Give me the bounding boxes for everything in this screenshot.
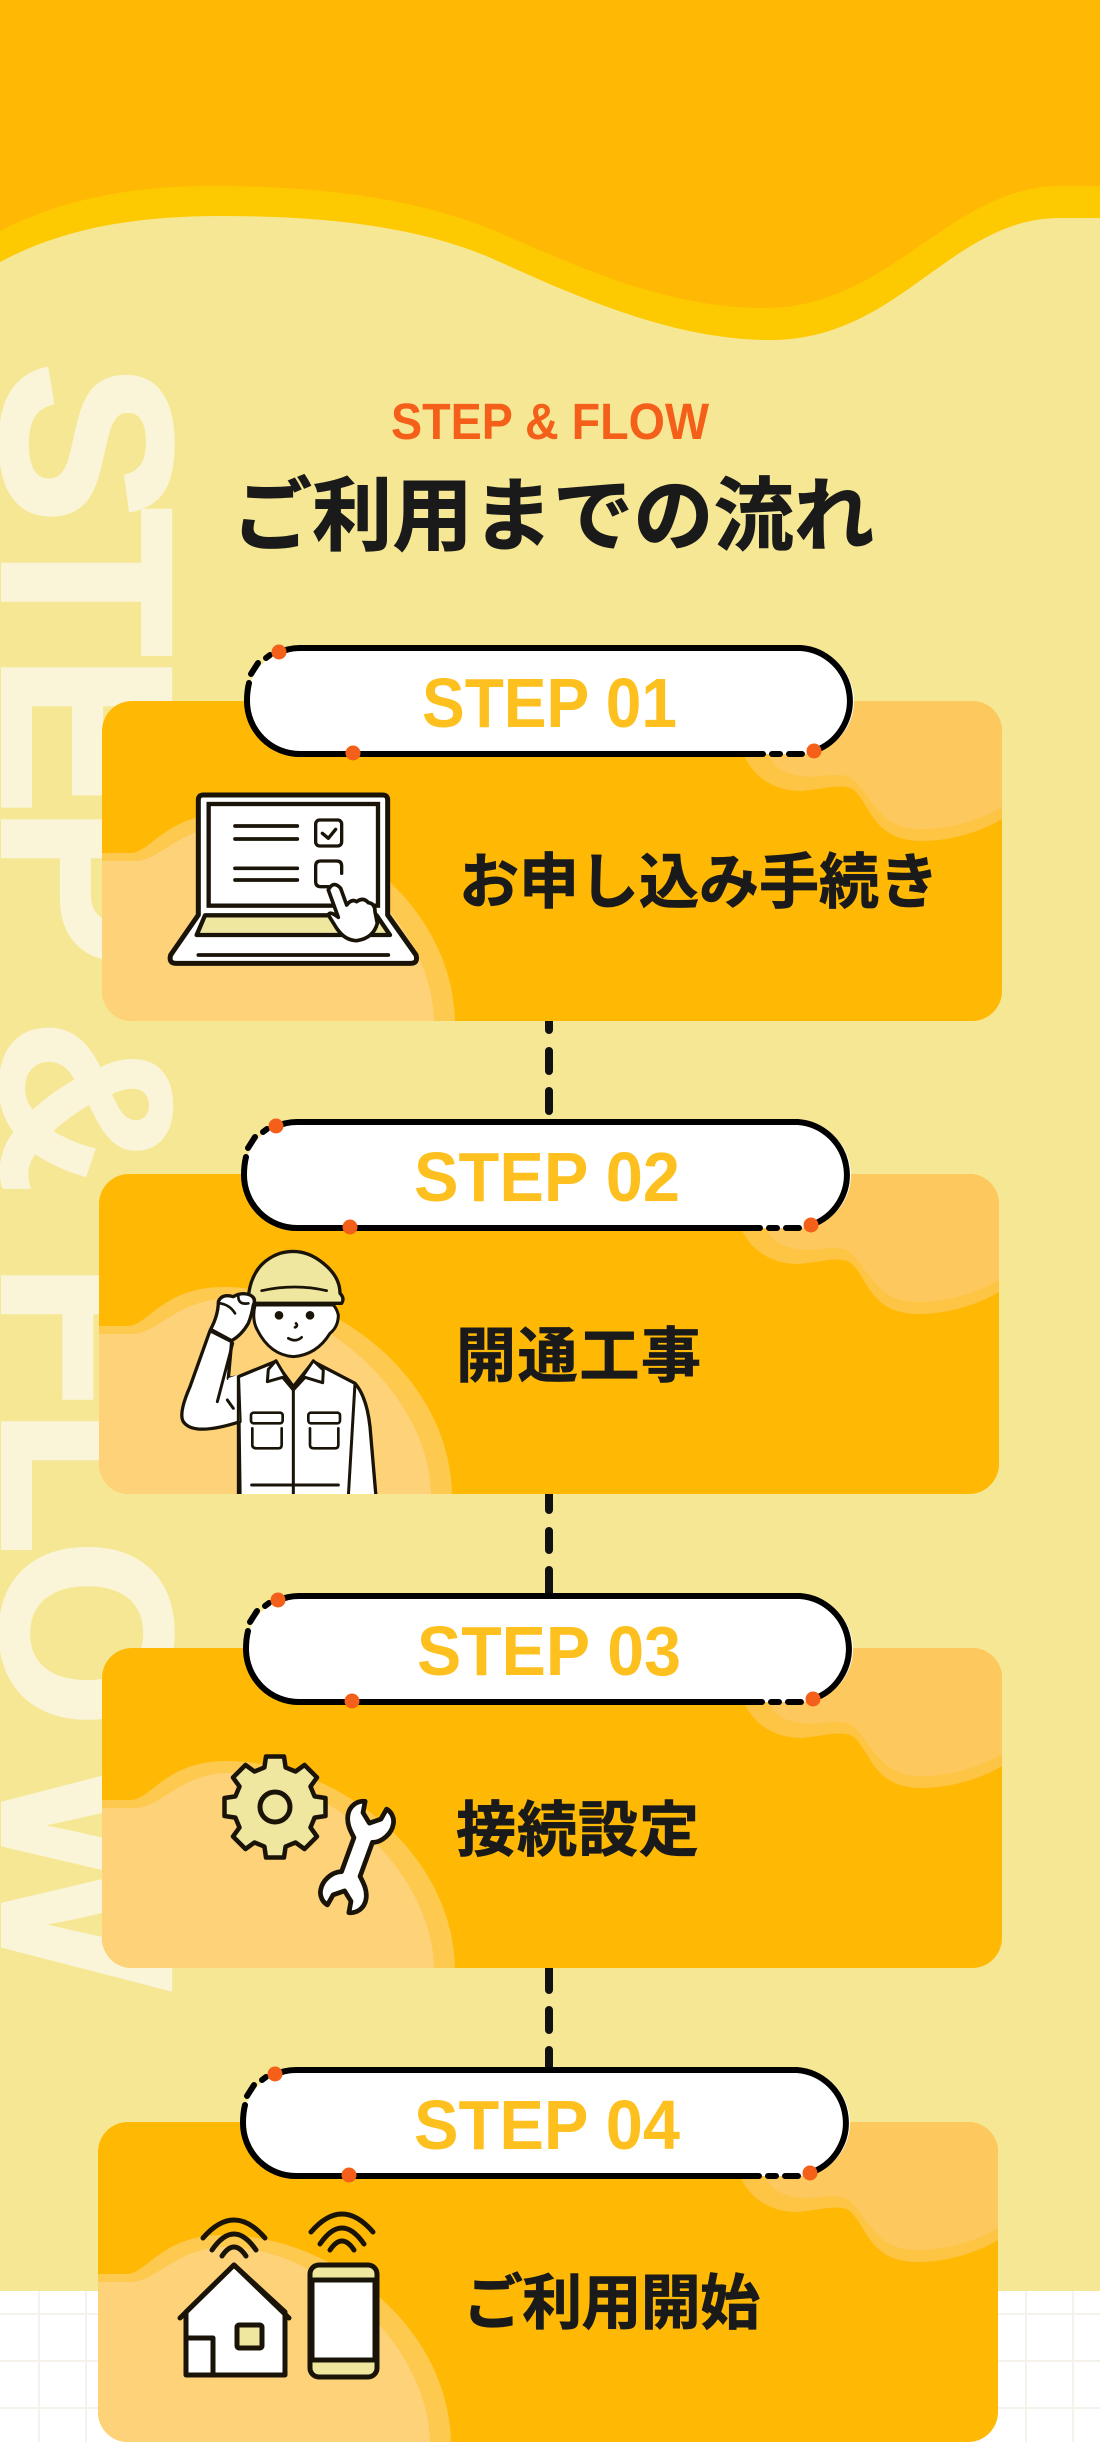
panel: step 04 <box>98 2066 998 2442</box>
card background 01 <box>102 701 1002 1021</box>
pill badge 04 <box>243 2066 850 2182</box>
panel: step 02 <box>99 1118 999 1497</box>
card background 04 <box>98 2122 998 2442</box>
title: ご利用までの流れ <box>232 472 874 561</box>
pill badge 02 <box>244 1118 851 1234</box>
icon: laptop with checklist <box>170 795 417 963</box>
pill badge 01 <box>247 644 854 760</box>
panel: step 01 <box>102 644 1002 1021</box>
card background 03 <box>102 1648 1002 1968</box>
icon: gear <box>224 1756 326 1858</box>
bottom white grid background <box>0 2291 1100 2442</box>
section label: STEP & FLOW <box>391 393 710 450</box>
panel: step 03 <box>102 1592 1002 1968</box>
header wave <box>0 0 1100 340</box>
icon: house with wifi <box>180 2220 289 2375</box>
card title 02: 開通工事 <box>456 1323 701 1390</box>
pill badge 01: STEP 01 <box>422 664 677 742</box>
pill badge 03 <box>246 1592 853 1708</box>
card title 01: お申し込み手続き <box>459 849 939 916</box>
connector: step 1 to 2 <box>545 1015 553 1111</box>
connector: step 3 to 4 <box>545 1960 553 2070</box>
pill badge 04: STEP 04 <box>414 2086 680 2164</box>
card title 03: 接続設定 <box>456 1797 699 1864</box>
pill badge 02: STEP 02 <box>414 1138 680 1216</box>
icon: smartphone with wifi <box>310 2214 377 2377</box>
icon: worker in helmet <box>182 1251 376 1497</box>
card background 02 <box>99 1174 999 1494</box>
connector: step 2 to 3 <box>545 1490 553 1600</box>
pill badge 03: STEP 03 <box>417 1612 681 1690</box>
card title 04: ご利用開始 <box>463 2270 760 2337</box>
icon: wrench <box>316 1797 398 1917</box>
